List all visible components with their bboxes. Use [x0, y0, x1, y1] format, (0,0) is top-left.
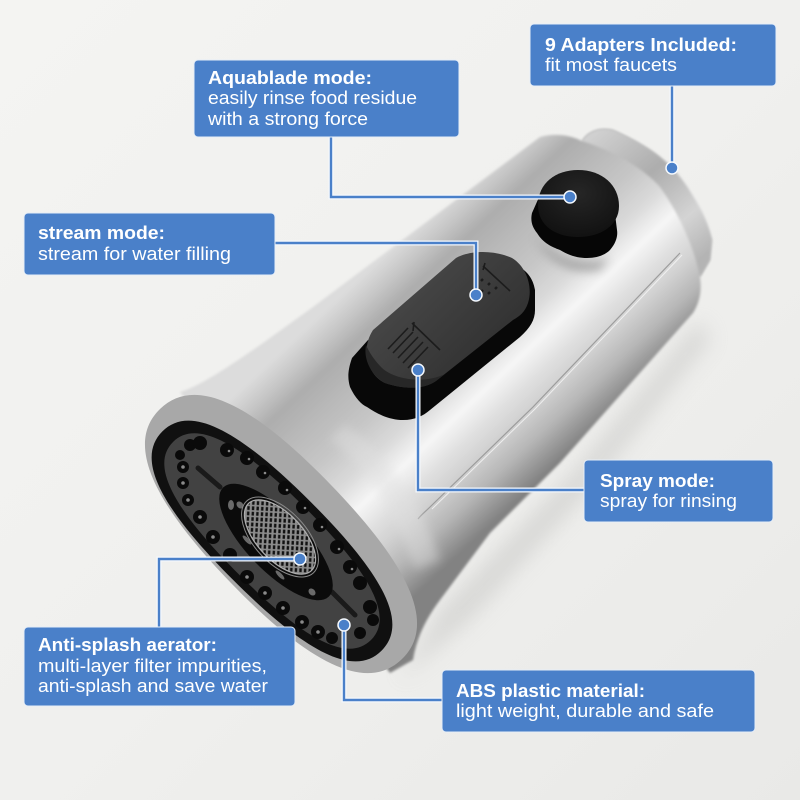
face plate	[140, 409, 404, 673]
callout: abs plastic material: ABS plastic material:	[456, 680, 645, 701]
round button skirt	[531, 190, 617, 258]
connector: aerator	[159, 553, 306, 627]
connector: abs	[338, 619, 442, 700]
hub openings	[228, 500, 317, 597]
metal body	[180, 129, 712, 673]
mesh outer ring	[228, 483, 332, 591]
stream icon	[474, 263, 510, 294]
rocker switch	[367, 252, 530, 388]
callout: aquablade mode: with a strong force	[207, 108, 368, 129]
tail collar	[582, 129, 712, 277]
callout: aquablade mode	[194, 60, 459, 137]
callout: abs plastic material	[442, 670, 755, 732]
callout: spray mode	[584, 460, 773, 522]
callout: abs plastic material: light weight, durable and safe	[456, 700, 714, 721]
flare highlight	[330, 425, 440, 570]
nozzle ring upper	[184, 436, 379, 626]
callout: 9 adapters: fit most faucets	[545, 54, 677, 75]
button shadow	[535, 235, 610, 271]
round button	[538, 170, 619, 237]
rocker side shade	[365, 345, 445, 388]
rim	[110, 360, 452, 708]
callout: stream mode: stream for water filling	[38, 243, 231, 264]
callout: stream mode: stream mode:	[38, 222, 165, 243]
connector: aquablade	[331, 137, 576, 203]
centre hub	[202, 467, 350, 617]
callout: stream mode	[24, 213, 275, 275]
nozzle highlights	[181, 450, 353, 634]
spray icon	[388, 322, 440, 368]
callout: anti-splash aerator: Anti-splash aerator:	[38, 634, 217, 655]
connector: adapters	[666, 86, 678, 174]
aerator mesh	[232, 488, 328, 586]
body seam highlight	[432, 255, 682, 509]
callout: aquablade mode: Aquablade mode:	[208, 67, 372, 88]
callout: 9 adapters	[530, 24, 776, 86]
callout: spray mode: spray for rinsing	[600, 490, 737, 511]
black face	[124, 393, 420, 689]
connector: stream	[275, 243, 482, 301]
nozzle ring lower	[175, 450, 366, 644]
connector: spray	[412, 364, 584, 490]
callout: anti-splash aerator	[24, 627, 295, 706]
body seam	[418, 253, 680, 519]
callout: spray mode: Spray mode:	[600, 470, 715, 491]
rocker recess	[348, 267, 535, 420]
callout: anti-splash aerator: multi-layer filter impurities,	[38, 655, 267, 676]
face slots	[198, 468, 355, 615]
callout: anti-splash aerator: anti-splash and save water	[38, 675, 268, 696]
sprayer head product	[110, 129, 712, 708]
callout: aquablade mode: easily rinse food residue	[208, 87, 417, 108]
callout: 9 adapters: 9 Adapters Included:	[545, 34, 737, 55]
